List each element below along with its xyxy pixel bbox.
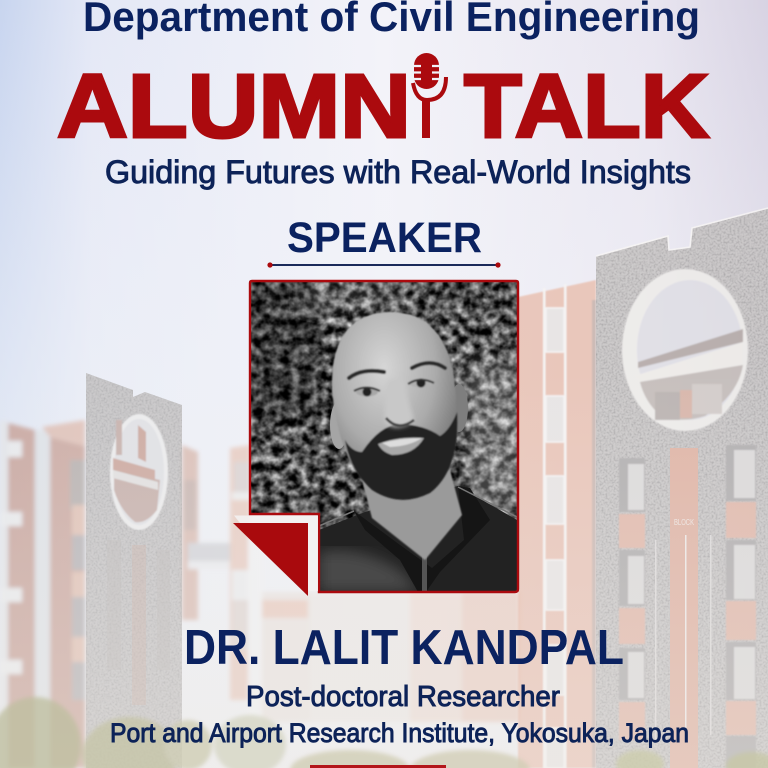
speaker affiliation: Port and Airport Research Institute, Yokosuka, Japan	[110, 718, 689, 748]
bridge	[188, 543, 232, 569]
beard	[345, 412, 457, 500]
windows: right tower	[619, 445, 756, 768]
title: alumni talk	[57, 53, 709, 157]
building: right block	[518, 280, 596, 768]
brick strip: tower centre	[670, 448, 698, 768]
window: right tower circle	[622, 269, 748, 431]
speaker name: DR. LALIT KANDPAL	[184, 621, 624, 675]
building: centre block	[230, 445, 520, 723]
speaker photo	[249, 280, 520, 595]
tower: right	[596, 208, 768, 768]
bushes	[0, 697, 768, 768]
title: alumni talk: ALUMN	[57, 57, 411, 157]
photo shading: foliage tone	[249, 280, 520, 510]
speaker heading: SPEAKER	[287, 214, 482, 262]
building: left block	[0, 420, 232, 768]
wing: left block right side	[182, 445, 198, 620]
icon: microphone	[413, 53, 446, 138]
mouth	[378, 438, 424, 455]
corner accent: triangle	[233, 516, 318, 596]
brows	[349, 363, 445, 378]
speaker role: Post-doctoral Researcher	[246, 681, 560, 713]
windows: brick wing column	[546, 308, 564, 768]
tower: left	[86, 373, 182, 768]
ears	[330, 404, 344, 449]
sign: block: BLOCK	[674, 518, 694, 527]
photo frame	[250, 281, 518, 592]
title: alumni talk: TALK	[464, 57, 709, 157]
eyes	[354, 378, 434, 396]
neck	[362, 470, 462, 560]
window: left tower circle	[110, 414, 168, 530]
jacket	[319, 486, 517, 592]
bottom red bar	[310, 765, 446, 768]
haze overlay	[0, 370, 768, 768]
speaker underline	[267, 262, 501, 268]
nose	[386, 396, 414, 430]
face	[332, 312, 457, 500]
tagline: Guiding Futures with Real-World Insights	[105, 154, 691, 190]
head	[331, 311, 457, 475]
